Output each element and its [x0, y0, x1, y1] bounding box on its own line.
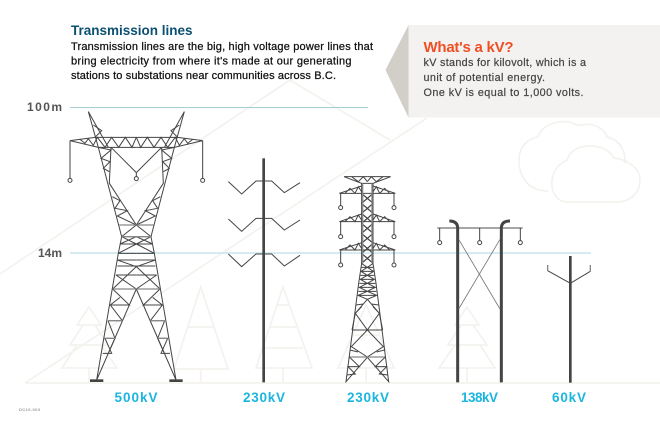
- voltage labels: 230kV: [243, 390, 285, 405]
- pole: 230kV single: [228, 158, 300, 382]
- background: mountains and ground: [0, 80, 660, 383]
- voltage labels: 138kV: [461, 390, 498, 405]
- panel: what's a kV: [386, 25, 660, 118]
- tower: 230kV lattice: [339, 177, 396, 382]
- intro text: [71, 41, 373, 82]
- voltage labels: 500kV: [114, 390, 158, 405]
- tower: 500kV: [68, 112, 205, 382]
- intro text: stations to substations near communities across B.C.: [71, 70, 336, 82]
- panel: what's a kV: What's a kV?: [424, 39, 514, 56]
- intro text: Transmission lines are the big, high voltage power lines that: [71, 41, 373, 53]
- background: trees: [62, 287, 495, 383]
- background: cloud: [519, 122, 640, 202]
- voltage labels: 230kV: [347, 390, 389, 405]
- document code: DC19-003: [19, 407, 41, 412]
- panel: what's a kV: kV stands for kilovolt, which is a: [424, 57, 586, 69]
- pole: 138kV H-frame: [437, 221, 523, 382]
- height line: 100m: 100m: [27, 100, 62, 114]
- voltage labels: 60kV: [552, 390, 586, 405]
- title: Transmission lines: [71, 23, 192, 38]
- panel: what's a kV: One kV is equal to 1,000 volts.: [424, 87, 584, 99]
- height line: 14m: 14m: [38, 246, 62, 260]
- voltage labels: [114, 390, 586, 405]
- panel: what's a kV: unit of potential energy.: [424, 72, 545, 84]
- pole: 60kV: [548, 256, 590, 383]
- intro text: bring electricity from where it's made at our generating: [71, 56, 352, 68]
